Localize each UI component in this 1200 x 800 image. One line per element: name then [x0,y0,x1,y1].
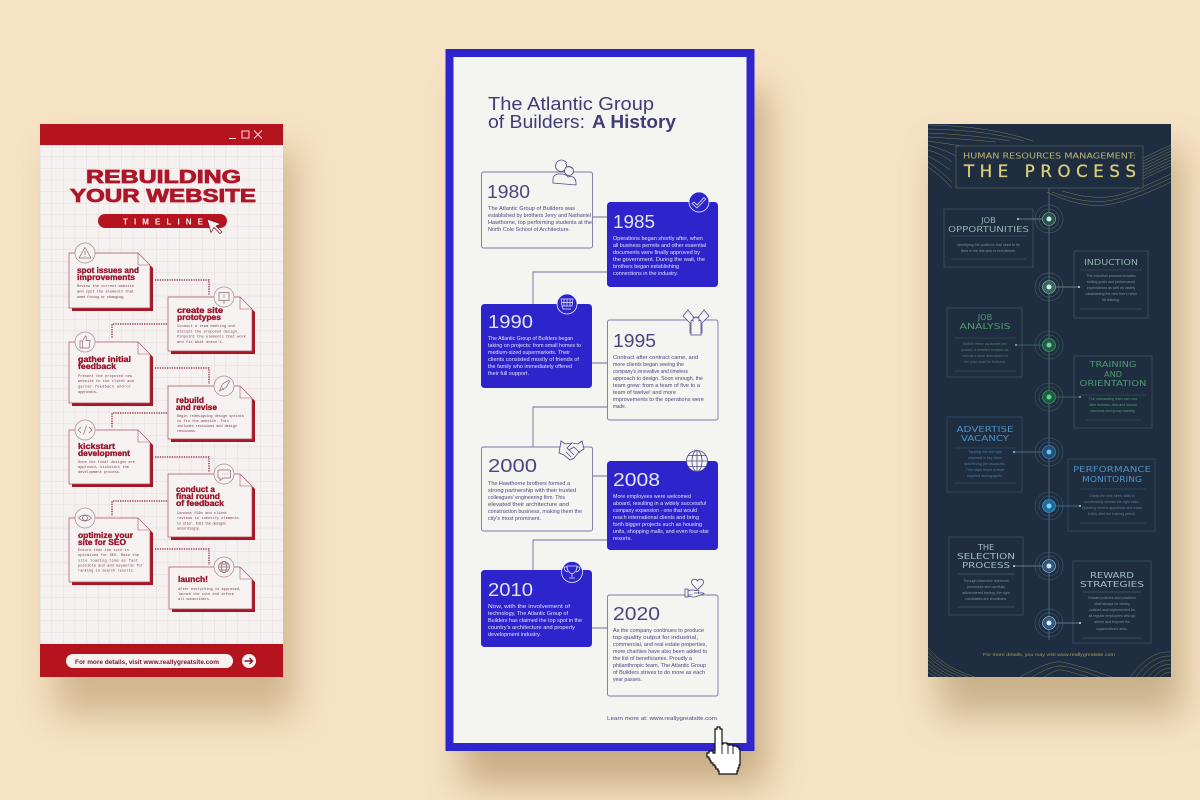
node 3 job analysis: well as a clear description of [962,354,1008,358]
node 6 performance monitoring: Quarterly review appraisals and exam [1082,506,1142,510]
card 1995: team grew: from a team of five to a [613,383,700,389]
step: spot issues: need fixing or changing. [77,295,125,300]
title [70,166,256,206]
node 5 advertise vacancy: Tapping into the right [968,450,1002,454]
footer link: Learn more at: www.reallygreatsite.com [607,716,717,722]
card 1980: established by brothers Jerry and Nathaniel [488,213,591,219]
card 2010: development industry. [488,632,541,638]
step: kickstart development: development [78,448,130,458]
step: gather initial feedback: feedback [78,361,116,371]
node 7 the selection process: Through extensive reference [963,579,1009,583]
step: optimize for SEO: optimized for SEO. Make the [78,553,139,558]
node 7 the selection process: THE [977,542,994,552]
card 1990: clients consisted mostly of friends of [488,357,580,363]
node 5 advertise vacancy: channels is key when [968,456,1002,460]
node 8 reward strategies: shall always be clearly [1094,602,1130,606]
step: create site prototypes: discuss the proposed design. [177,330,239,334]
timeline connectors [533,217,607,628]
node 8 reward strategies: STRATEGIES [1080,579,1144,589]
node 2 induction: for training. [1102,298,1120,302]
node 5 advertise vacancy: VACANCY [961,433,1010,443]
node 4 training and orientation: ORIENTATION [1080,378,1146,388]
node 3 job analysis: JOB [977,312,993,322]
step: spot issues: and spot the elements that [77,290,134,294]
step: launch: all subscribers. [178,597,211,602]
step: optimize for SEO: site for SEO [78,537,126,547]
card 2010: country's architecture and property [488,625,575,631]
node 6 performance monitoring: successfully assess the right tasks. [1084,500,1140,504]
node 3 job analysis: the post must be finalized. [964,360,1006,364]
node 1 job opportunities [944,205,1063,267]
node 7 the selection process: SELECTION [957,551,1015,561]
step: final round of feedback: reviews to identify elements [177,516,239,521]
step: create site prototypes: prototypes [177,312,221,322]
card 1985: connections in the industry. [613,271,678,277]
step: gather initial feedback: gather initial [78,354,131,364]
step: kickstart development: approved, kickstart the [78,465,129,470]
card 1995: 1995 [613,330,656,351]
node 2 induction: The induction process includes [1086,274,1136,278]
header box: THE PROCESS [963,162,1136,181]
card 2020: more charities have also been added to [613,649,707,655]
panel: rebuilding your website [40,124,283,677]
card 2020: top quality output for industrial, [613,635,698,641]
card 1990: 1990 [488,311,533,332]
step: final round of feedback: to alter. Edit the designs [177,522,226,526]
card 2008 [607,450,718,550]
step: create site prototypes: and fix what doesn't. [177,340,224,345]
card 1985: brothers began establishing [613,264,679,270]
card 1980: 1980 [487,181,530,202]
icon: handshake [559,441,584,460]
window title bar [40,124,283,145]
node 8 reward strategies: REWARD [1090,570,1134,580]
node 2 induction: setting goals and performance [1087,280,1135,284]
step: spot issues: spot issues and [77,265,139,275]
card 1995: Contract after contract came, and [613,355,698,361]
node 5 advertise vacancy: This helps reach a more [966,468,1004,472]
card 1985: all business permits and other essential [613,243,706,249]
card 2020 [608,579,718,696]
card 1980 [482,160,592,248]
step: optimize for SEO: Ensure that the site is [78,548,129,553]
step: final round of feedback: final round [176,491,220,501]
card 1980: Hawthorne, top performing students at the [488,220,592,226]
step: kickstart development: Once the final designs are [78,460,135,465]
node 3 job analysis: ANALYSIS [960,321,1010,331]
node 8 reward strategies: above and beyond the [1094,620,1130,624]
node 7 the selection process: processes and carefully [967,585,1005,589]
step: kickstart development [69,420,153,487]
card 1990: their full support. [488,371,529,377]
panel: human resources process [928,124,1171,677]
node 1 job opportunities: filled is the first step to recruitment. [961,249,1016,253]
step: rebuild and revise [168,376,255,442]
title: REBUILDING [86,166,241,187]
node 4 training and orientation: TRAINING [1088,359,1136,369]
card 1995: approach to design. Soon enough, the [613,376,703,382]
card 2010: 2010 [488,579,533,600]
timeline pill [98,214,227,234]
node 1 job opportunities: Identifying the positions that need to be [957,243,1020,247]
card 1985: Operations began shortly after, when [613,236,703,242]
header box: HUMAN RESOURCES MANAGEMENT: [963,152,1136,160]
node 3 job analysis: posted, a detailed analysis as [961,348,1009,352]
card 1985: the government. During the wait, the [613,257,705,263]
node 5 advertise vacancy: advertising job vacancies. [964,462,1006,466]
title: The Atlantic Group [488,93,654,114]
card 1985: 1985 [613,211,655,232]
step: launch: launch the site and inform [178,592,235,597]
node 8 reward strategies: organization's aims. [1096,627,1128,631]
card 1995: company's innovative and timeless [613,369,688,375]
node 2 induction: expectations as well as clearly [1087,286,1135,290]
step: spot issues: Review the current website [77,284,134,289]
node 5 advertise vacancy: targeted demographic. [967,474,1003,478]
step: gather initial feedback: website to the client and [78,379,134,384]
step: rebuild and revise: includes revisions and design [177,424,237,429]
card 2000: elevated their architecture and [488,502,569,508]
footer bar: For more details, visit www.reallygreatsite.com [75,659,219,666]
icon: shopping cart [557,294,577,314]
step: optimize for SEO: site loading time as fast [78,558,138,564]
node 8 reward strategies: all regular employees who go [1089,614,1135,618]
card 1995 [608,310,718,420]
step: rebuild and revise: Begin redesigning design sprints [177,414,244,419]
node 7 the selection process: candidates are shortlisted. [965,597,1007,601]
node 2 induction: establishing the new hire's need [1085,292,1137,296]
node 5 advertise vacancy [947,417,1063,492]
header box [956,146,1143,188]
node 4 training and orientation: offer lectures, labs and tutorial [1089,403,1137,407]
footer bar [40,644,283,677]
icon: joined hands [683,310,709,335]
node 8 reward strategies [1035,561,1151,643]
step: final round of feedback: conduct a [176,484,215,494]
step: create site prototypes: Pinpoint the elements that work [177,334,247,340]
card 2008: units, shopping malls, and even four-star [613,529,709,535]
card 1990: taking on projects: from small homes to [488,343,581,349]
step: final round of feedback [168,464,255,540]
node 3 job analysis [947,308,1063,377]
card 2008: forth bigger projects such as housing [613,522,702,528]
footer note: For more details, you may visit www.reallygreatsite.com [983,652,1115,658]
node 5 advertise vacancy: ADVERTISE [956,424,1014,434]
connectors [112,280,209,565]
card 2000: The Hawthorne brothers formed a [488,481,570,487]
step: rebuild and revise: revisions. [177,429,197,434]
step: rebuild and revise: to fix the website. This [177,419,229,424]
step: optimize for SEO: optimize your [78,530,134,540]
step: create site prototypes: create site [177,305,223,315]
node 6 performance monitoring [1035,459,1155,531]
card 2020: As the company continues to produce [613,628,704,634]
step: create site prototypes: Conduct a team meeting and [177,324,235,329]
step: final round of feedback: Conduct FGDs and client [177,511,227,516]
node 2 induction: INDUCTION [1084,257,1138,267]
step: optimize for SEO: ranking in search results. [78,568,135,574]
timeline spine [1048,188,1050,640]
node 7 the selection process [949,537,1063,615]
card 1980: North Cole School of Architecture. [488,227,570,233]
icon: pixel hand cursor [707,727,740,774]
step: optimize for SEO: possible and add keywords for [78,564,143,568]
title [488,93,677,132]
node 7 the selection process: administered testing, the right [962,591,1010,595]
node 6 performance monitoring: Check the new hire's skills to [1089,494,1135,498]
card 2020: the list of beneficiaries. Proudly a [613,656,692,662]
title: of Builders: [488,111,585,132]
card 2008: aboard, resulting in a widely successful [613,501,706,507]
step: final round of feedback: accordingly. [177,526,201,532]
panel: the atlantic group history [450,53,750,747]
node 2 induction [1035,251,1148,318]
icon: trophy [562,562,582,582]
icon: heart in hand [685,579,704,597]
card 1985: documents were finally approved by [613,250,700,256]
card 1985 [607,192,718,287]
title: A History [592,111,677,132]
card 2000: 2000 [488,455,537,476]
card 2000: city's most prominent. [488,516,541,522]
card 2008: company expansion - one that would [613,508,697,514]
card 1995: team of twelve! and more [613,390,676,396]
node 3 job analysis: Before these vacancies are [963,342,1007,346]
card 2010: Now, with the involvement of [488,604,571,610]
card 2020: philanthropic team, The Atlantic Group [613,663,706,669]
card 1990: The Atlantic Group of Builders began [488,336,573,342]
card 1995: made. [613,404,626,410]
node 4 training and orientation: sessions and group training. [1091,409,1135,413]
node 4 training and orientation [1035,356,1152,428]
node 6 performance monitoring: follow after the training period. [1088,512,1136,516]
step: spot issues [69,243,153,311]
card 2020: year passes. [613,677,642,683]
card 2000: strong partnership with their trusted [488,488,576,494]
icon: globe [686,450,708,472]
node 4 training and orientation: AND [1104,369,1122,379]
card 1990: medium-sized supermarkets. Their [488,350,570,356]
card 2010: Builders has claimed the top spot in the [488,618,582,624]
card 2000 [482,441,592,531]
card 2008: reach international clients and bring [613,515,699,521]
card 2020: commercial, and real estate properties, [613,642,707,648]
step: final round of feedback: of feedback [176,498,224,508]
card 1990: the family who immediately offered [488,364,572,370]
card 2020: 2020 [613,603,660,624]
card 2008: More employees were welcomed [613,494,691,500]
step: kickstart development: development process. [78,470,121,475]
icon: people [553,160,576,185]
node 4 training and orientation: The onboarding team can now [1089,397,1138,401]
step: gather initial feedback: Present the proposed new [78,374,133,379]
timeline pill: TIMELINE [123,218,204,226]
step: spot issues: improvements [77,272,135,282]
step: launch [169,557,255,612]
card 2010: technology, The Atlantic Group of [488,611,569,617]
step: gather initial feedback: approvals. [78,390,98,395]
step: kickstart development: kickstart [78,441,115,451]
card 2008: 2008 [613,469,660,490]
card 2008: resorts. [613,536,632,542]
card 2010 [481,562,592,647]
step: rebuild and revise: and revise [176,402,217,412]
card 1995: more clients began seeing the [613,362,684,368]
step: launch: launch! [178,574,208,584]
icon: checkmark [689,192,709,212]
title: YOUR WEBSITE [70,185,256,206]
step: launch: After everything is approved, [178,587,241,592]
node 1 job opportunities: JOB [980,215,996,225]
card 2000: construction business, making them the [488,509,582,515]
step: create site prototypes [168,287,255,354]
step: gather initial feedback: garner feedback and/or [78,384,131,390]
node 7 the selection process: PROCESS [962,560,1010,570]
decorative contour lines [928,125,1171,677]
card 1980: The Atlantic Group of Builders was [488,206,575,212]
card 2020: of Builders strives to do more as each [613,670,705,676]
card 1990 [481,294,592,388]
step: gather initial feedback [69,332,153,406]
node 6 performance monitoring: MONITORING [1082,474,1142,484]
node 6 performance monitoring: PERFORMANCE [1073,464,1151,474]
step: rebuild and revise: rebuild [176,395,204,405]
node 8 reward strategies: outlined and implemented for [1089,608,1136,612]
node 1 job opportunities: OPPORTUNITIES [948,224,1029,234]
card 2000: colleagues' engineering firm. This [488,495,565,501]
card 1995: improvements to the operations were [613,397,704,403]
node 8 reward strategies: Reward policies and practices [1088,596,1136,600]
step: optimize for SEO [69,508,153,585]
